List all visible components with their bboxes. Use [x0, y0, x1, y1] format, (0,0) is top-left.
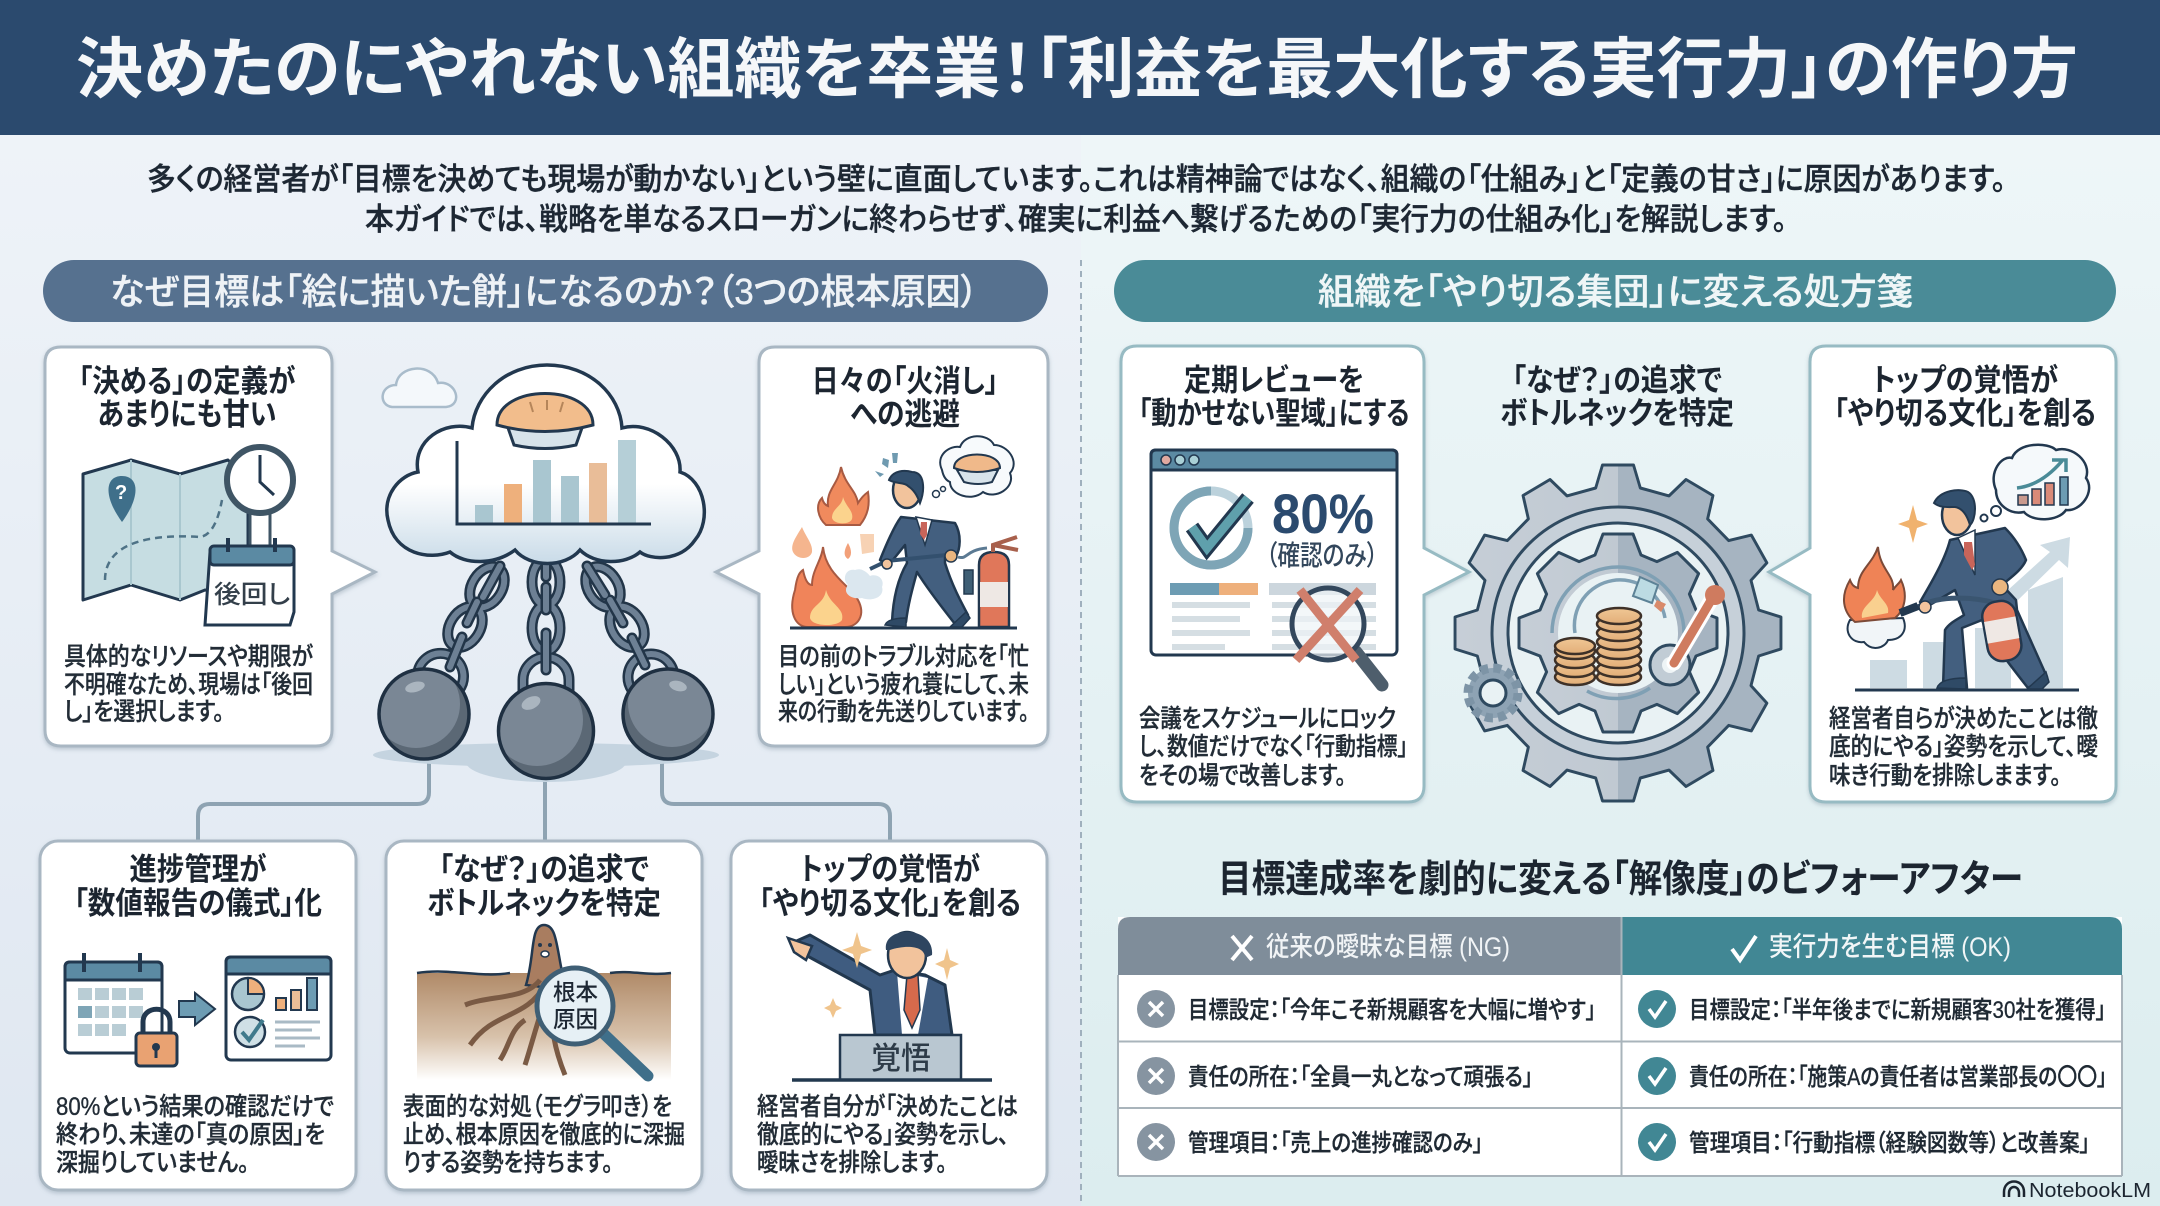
row 1 goal setting: 目標設定：「今年こそ新規顧客を大幅に増やす」 — [1188, 997, 1596, 1024]
right section heading — [1114, 260, 2116, 322]
icon: leader extinguishing with growth arrow — [1844, 445, 2089, 690]
body text: 来の行動を先送りしています。 — [778, 698, 1029, 726]
table header OK: 実行力を生む目標 (OK) — [1769, 932, 2011, 962]
icon: leader at podium — [788, 932, 992, 1080]
heading: トップの覚悟が — [800, 852, 980, 887]
heading: bottleneck — [1500, 363, 1734, 431]
body text: 経営者自らが決めたことは徹 — [1829, 705, 2098, 733]
pie — [497, 394, 593, 448]
body text: し、数値だけでなく「行動指標」 — [1139, 733, 1408, 761]
heading — [74, 852, 322, 921]
icon: root cause under magnifier: 原因 — [553, 1006, 598, 1032]
icon: root cause under magnifier: 根本 — [553, 979, 598, 1005]
body text: し」を選択します。 — [64, 698, 224, 726]
panel: prescription 3 top resolve — [1769, 346, 2116, 802]
heading: 進捗管理が — [130, 852, 267, 887]
intro text: 多くの経営者が「目標を決めても現場が動かない」という壁に直面しています。これは精神論ではなく、組織の「仕組み」と「定義の甘さ」に原因があります。 — [147, 162, 2006, 197]
heading: トップの覚悟が — [1872, 363, 2058, 398]
row 3 management items: 管理項目：「行動指標（経験図数等）と改善案」 — [1689, 1130, 2090, 1157]
icon: leader at podium: 覚悟 — [871, 1041, 931, 1076]
heading: 日々の「火消し」 — [812, 364, 998, 399]
small cog — [1468, 668, 1518, 718]
left section heading — [43, 260, 1048, 322]
body text: 味き行動を排除しまます。 — [1829, 762, 2061, 790]
icon: calendar, lock and dashboard — [65, 953, 331, 1066]
title banner — [0, 0, 2160, 135]
heading: 「やり切る文化」を創る — [759, 886, 1021, 921]
body text: 80%という結果の確認だけで — [56, 1093, 334, 1121]
body text: 底的にやる」姿勢を示して、曖 — [1829, 733, 2098, 761]
body text: 止め、根本原因を徹底的に深掘 — [403, 1121, 685, 1149]
row 2 responsibility — [1137, 1057, 2107, 1095]
table header NG: 従来の曖昧な目標 (NG) — [1266, 932, 1510, 962]
body text — [64, 643, 313, 726]
heading: ボトルネックを特定 — [427, 886, 661, 921]
row 3 management items — [1137, 1123, 2090, 1161]
body text — [403, 1093, 685, 1177]
panel: cause 3 numeric reporting ritual — [40, 841, 356, 1190]
body text: をその場で改善します。 — [1139, 762, 1346, 790]
panel: cause 2 escape to firefighting — [716, 347, 1048, 746]
connectors from weights to cards — [198, 760, 890, 842]
heading: 定期レビューを — [1184, 363, 1364, 398]
heading: bottleneck: ボトルネックを特定 — [1500, 396, 1734, 431]
chart in cloud — [457, 440, 651, 524]
body text: 表面的な対処（モグラ叩き）を — [403, 1093, 672, 1121]
body text: 曖昧さを排除します。 — [757, 1149, 947, 1177]
body text: 徹底的にやる」姿勢を示し、 — [757, 1121, 1009, 1149]
heading: あまりにも甘い — [98, 397, 276, 432]
heading: 「動かせない聖域」にする — [1138, 396, 1410, 431]
body text — [778, 643, 1029, 726]
icon: map, clock and calendar: 後回し — [214, 581, 290, 609]
intro text: 本ガイドでは、戦略を単なるスローガンに終わらせず、確実に利益へ繋げるための「実行力の仕組み化」を解説します。 — [365, 202, 1787, 237]
title banner: 決めたのにやれない組織を卒業！「利益を最大化する実行力」の作り方 — [76, 32, 2078, 106]
heading: への逃避 — [850, 397, 960, 432]
icon: map, clock and calendar: ? — [115, 482, 127, 504]
icon: central gear with coins — [1455, 465, 1781, 801]
table header NG — [1118, 917, 1621, 975]
small cloud — [383, 369, 456, 407]
panel: cause 4 root cause — [386, 841, 702, 1190]
body text: 深掘りしていません。 — [56, 1149, 249, 1177]
heading: before and after table: 目標達成率を劇的に変える「解像度」のビフォーアフター — [1218, 859, 2023, 901]
icon: dashboard window with 80 percent: （確認のみ） — [1266, 540, 1378, 571]
central illustration: cloud, chains and weights — [372, 365, 719, 782]
heading — [812, 364, 998, 432]
icon: dashboard window with 80 percent — [1151, 450, 1397, 685]
heading — [78, 364, 296, 432]
icon: map, clock and calendar — [83, 447, 294, 625]
heading: 「数値報告の儀式」化 — [74, 886, 322, 921]
body text: 終わり、未達の「真の原因」を — [56, 1121, 325, 1149]
cloud — [387, 365, 704, 564]
heading: 「やり切る文化」を創る — [1834, 396, 2096, 431]
coins — [1555, 608, 1641, 685]
panel: cause 1 definition is too loose — [45, 347, 375, 746]
body text: 経営者自分が「決めたことは — [757, 1093, 1018, 1121]
icon: manager extinguishing fires — [790, 436, 1018, 628]
body text: りする姿勢を持ちます。 — [403, 1149, 613, 1177]
body text: 不明確なため、現場は「後回 — [64, 671, 313, 699]
row 1 goal setting — [1137, 990, 2106, 1028]
ground shadow — [373, 742, 719, 782]
icon: root cause under magnifier — [417, 925, 671, 1080]
chains — [418, 552, 674, 695]
body text — [757, 1093, 1018, 1177]
panel: prescription 1 sacred reviews — [1121, 346, 1469, 802]
row 2 responsibility: 責任の所在：「全員一丸となって頑張る」 — [1188, 1064, 1533, 1091]
body text: しい」という疲れ蓑にして、未 — [778, 671, 1029, 699]
heading — [1834, 363, 2096, 431]
heading — [427, 852, 661, 921]
heading — [759, 852, 1021, 921]
body text: 目の前のトラブル対応を「忙 — [778, 643, 1029, 671]
table header OK — [1622, 917, 2122, 975]
left section heading: なぜ目標は「絵に描いた餅」になるのか？（3つの根本原因） — [110, 271, 978, 312]
heading: 「決める」の定義が — [78, 364, 296, 399]
icon: dashboard window with 80 percent: 80% — [1272, 482, 1374, 545]
body text: 具体的なリソースや期限が — [64, 643, 313, 671]
lever — [1650, 645, 1690, 685]
heading: bottleneck: 「なぜ？」の追求で — [1512, 363, 1722, 398]
before and after table — [1118, 917, 2122, 1176]
body text — [56, 1093, 334, 1177]
body text — [1139, 705, 1408, 790]
heading — [1138, 363, 1410, 431]
heading: 「なぜ？」の追求で — [439, 852, 649, 887]
body text: 会議をスケジュールにロック — [1139, 705, 1396, 733]
right section heading: 組織を「やり切る集団」に変える処方箋 — [1318, 271, 1913, 312]
panel: cause 5 top leadership — [731, 841, 1047, 1190]
NotebookLM logo: NotebookLM — [2029, 1180, 2151, 1202]
intro text — [147, 162, 2006, 237]
weights — [372, 659, 716, 778]
body text — [1829, 705, 2098, 790]
row 3 management items: 管理項目：「売上の進捗確認のみ」 — [1188, 1130, 1483, 1157]
